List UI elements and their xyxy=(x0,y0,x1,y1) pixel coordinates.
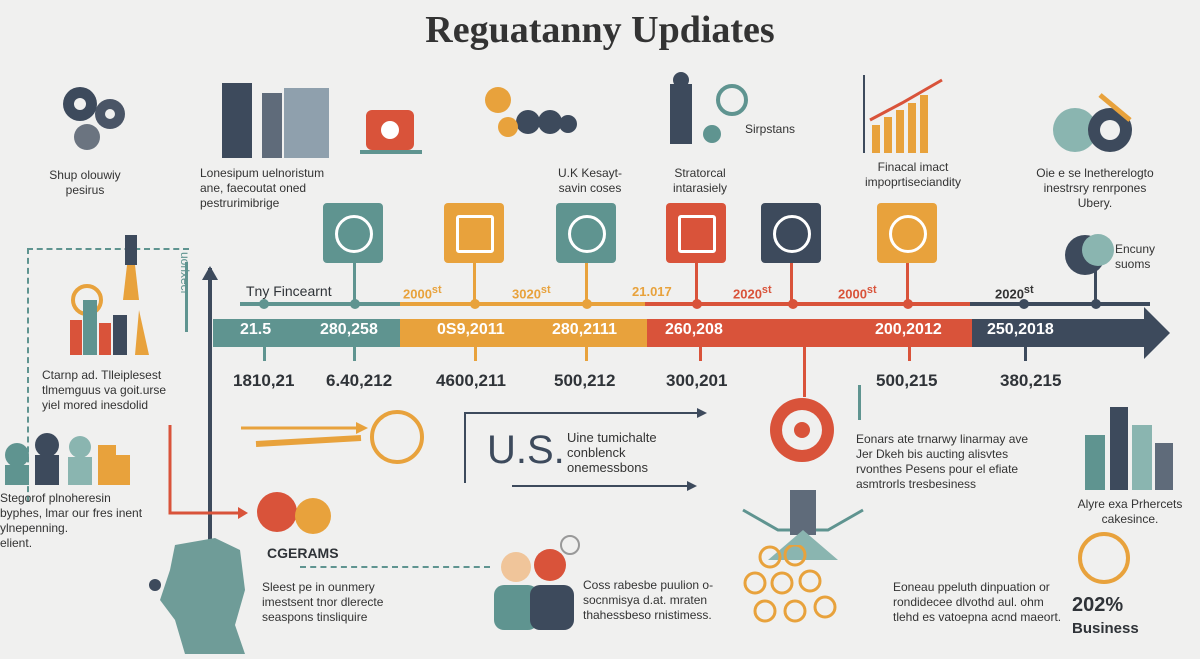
icon: person presenting xyxy=(670,72,748,144)
connectors xyxy=(353,262,356,302)
text: left panel: tlmemguus va goit.urse xyxy=(42,383,166,397)
arrows: middle xyxy=(241,422,368,447)
text: stratorcal xyxy=(673,166,727,195)
text: stratorcal: intarasiely xyxy=(673,181,727,195)
icon: clock xyxy=(370,410,424,464)
icon: two people xyxy=(494,535,580,630)
text: 280,258 xyxy=(320,321,378,338)
text: coss: thahessbeso rnistimess. xyxy=(583,608,712,622)
text: streets: seaspons tinsliquire xyxy=(262,610,367,624)
text: left panel: Ctarnp ad. Tlleiplesest xyxy=(42,368,161,382)
text: 4600,211 xyxy=(436,371,506,390)
text: vertical side label: uorlxecr xyxy=(178,252,192,295)
text: enans: Jer Dkeh bis aucting alisvtes xyxy=(856,447,1008,461)
text: bottom-left: byphes, lmar our fres inent xyxy=(0,506,142,520)
timeline bar xyxy=(213,307,1170,359)
text: cgerams: CGERAMS xyxy=(267,545,339,561)
left vertical arrow xyxy=(208,268,212,654)
text: financial impact xyxy=(865,160,961,189)
icon: gears xyxy=(63,87,125,150)
text: 2000st xyxy=(838,284,877,301)
text: streets: Sleest pe in ounmery xyxy=(262,580,375,594)
arrow: red to cgerams xyxy=(168,425,248,519)
text: 21.5 xyxy=(240,321,271,338)
US box xyxy=(464,408,707,491)
text: bottom right: tlehd es vatoepna acnd maeort. xyxy=(893,610,1061,624)
text: bottom right xyxy=(893,580,1061,624)
text: coss: Coss rabesbe puulion o- xyxy=(583,578,713,592)
icon boxes xyxy=(323,203,383,263)
text: bottom-left: Stegorof plnoheresin xyxy=(0,491,111,505)
icon: bag xyxy=(360,110,422,154)
text: sirpstans: Sirpstans xyxy=(745,122,795,136)
text: industry: Oie e se lnetherelogto xyxy=(1036,166,1154,180)
text: shup: Shup olouwiy xyxy=(49,168,121,182)
text: bottom right: rondidecee dlvothd aul. ohm xyxy=(893,595,1044,609)
text: encury xyxy=(1115,242,1155,271)
US box: conblenck xyxy=(567,445,626,460)
text: 500,212 xyxy=(554,371,615,390)
text: enans: Eonars ate trnarwy linarmay ave xyxy=(856,432,1028,446)
text: lorem: pestrurimibrige xyxy=(200,196,279,210)
icon: crowd xyxy=(5,433,130,485)
icon: bar chart xyxy=(863,75,943,153)
text: 250,2018 xyxy=(987,321,1054,338)
text: enans xyxy=(856,432,1028,491)
text: 6.40,212 xyxy=(326,371,392,390)
text: encury: Encuny xyxy=(1115,242,1155,256)
icon: meditating person xyxy=(742,490,864,560)
text: financial impact: Finacal imact xyxy=(878,160,948,174)
icon: buildings xyxy=(222,83,329,158)
icon: coins cluster xyxy=(744,545,836,622)
text: 2020st xyxy=(733,284,772,301)
text: bottom right: Eoneau ppeluth dinpuation or xyxy=(893,580,1050,594)
text: 202% business xyxy=(1072,594,1139,637)
text: UK kesayt: U.K Kesayt- xyxy=(558,166,622,180)
text: 1810,21 xyxy=(233,371,294,390)
text: shup: pesirus xyxy=(66,183,104,197)
text: industry xyxy=(1036,166,1154,210)
text: lorem: ane, faecoutat oned xyxy=(200,181,306,195)
text: 2020st xyxy=(995,284,1034,301)
US box: U.S. xyxy=(487,428,565,472)
text: 2000st xyxy=(403,284,442,301)
left panel: dashed box xyxy=(27,248,189,502)
text: streets xyxy=(262,580,383,624)
thin timeline line xyxy=(240,302,1150,306)
text: alvye: cakesince. xyxy=(1102,512,1158,526)
dashed arrow xyxy=(300,566,490,568)
text: alvye xyxy=(1078,497,1182,526)
text: encury: suoms xyxy=(1115,257,1150,271)
text: bottom-left: elient. xyxy=(0,536,32,550)
icon: globe xyxy=(1065,234,1114,275)
title: Reguatanny Updiates xyxy=(425,9,775,51)
text: lorem: Lonesipum uelnoristum xyxy=(200,166,324,180)
text: 260,208 xyxy=(665,321,723,338)
text: bottom-left xyxy=(0,491,142,550)
text: 3020st xyxy=(512,284,551,301)
icon: city xyxy=(1085,407,1173,490)
text: 280,2111 xyxy=(552,321,617,338)
icon: factory xyxy=(70,235,149,355)
US box: Uine tumichalte xyxy=(567,430,657,445)
text: enans: asmtrorls tresbesiness xyxy=(856,477,976,491)
text: left panel: yiel mored inesdolid xyxy=(42,398,148,412)
text: enans: rvonthes Pesens pour el efiate xyxy=(856,462,1018,476)
text: coss: socnmisya d.at. mraten xyxy=(583,593,707,607)
text: 202% business: Business xyxy=(1072,620,1139,637)
text: coss xyxy=(583,578,713,622)
icon: gear eye xyxy=(770,398,834,462)
map xyxy=(149,538,245,654)
text: industry: Ubery. xyxy=(1078,196,1112,210)
text: UK kesayt xyxy=(558,166,622,195)
text: industry: inestrsry renrpones xyxy=(1044,181,1146,195)
text: stratorcal: Stratorcal xyxy=(674,166,726,180)
text: financial impact: impoprtiseciandity xyxy=(865,175,961,189)
text: left panel xyxy=(42,368,166,412)
text: 202% business: 202% xyxy=(1072,594,1123,616)
text: 500,215 xyxy=(876,371,937,390)
icon: cgerams xyxy=(257,492,331,534)
icon: people coins xyxy=(485,87,577,137)
text: 300,201 xyxy=(666,371,727,390)
timeline labels: Tny Fincearnt xyxy=(246,283,332,299)
icon: tools xyxy=(1053,93,1132,152)
text: bottom-left: ylnepenning. xyxy=(0,521,68,535)
text: streets: imestsent tnor dlerecte xyxy=(262,595,383,609)
text: shup xyxy=(49,168,121,197)
text: 380,215 xyxy=(1000,371,1061,390)
text: 21.017 xyxy=(632,284,672,299)
text: 200,2012 xyxy=(875,321,942,338)
text: alvye: Alyre exa Prhercets xyxy=(1078,497,1182,511)
text: UK kesayt: savin coses xyxy=(559,181,621,195)
US box: onemessbons xyxy=(567,460,648,475)
text: 0S9,2011 xyxy=(437,321,505,338)
icon: circle badge xyxy=(1078,532,1130,584)
text: lorem xyxy=(200,166,324,210)
